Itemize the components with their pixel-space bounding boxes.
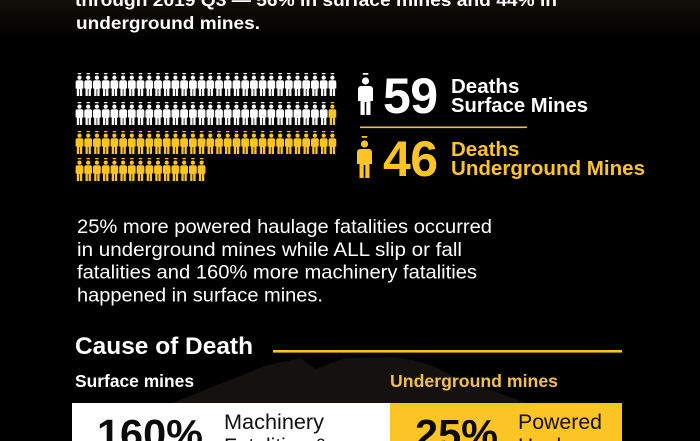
label: deaths underground mines: Underground Mines: [451, 157, 645, 180]
panel: surface mines: [72, 403, 390, 441]
icon: yellow person: [357, 136, 372, 178]
underground mines stat: [357, 131, 645, 187]
pictogram: 105 deaths, 59 white and 46 yellow: [76, 73, 336, 181]
heading: cause of death: Cause of Death: [75, 333, 253, 360]
body text: in underground mines while ALL slip or fall: [77, 240, 462, 261]
label: deaths surface mines: Surface Mines: [451, 94, 588, 117]
icon: white person: [358, 73, 373, 115]
label: deaths surface mines: Deaths: [451, 75, 519, 98]
intro text: [75, 0, 557, 33]
surface mines stat: [358, 68, 588, 124]
panel: underground mines: [390, 403, 622, 441]
body text: happened in surface mines.: [77, 286, 323, 306]
intro text: underground mines.: [76, 13, 260, 33]
subheading: underground mines: Underground mines: [390, 371, 558, 391]
number: 59: 59: [383, 68, 438, 124]
body text: [77, 217, 492, 306]
subheading: surface mines: Surface mines: [75, 371, 194, 391]
background mountain: [172, 357, 526, 441]
label: deaths underground mines: Deaths: [451, 138, 519, 161]
number: 46: 46: [383, 131, 438, 187]
body text: fatalities and 160% more machinery fatalities: [77, 262, 477, 284]
body text: 25% more powered haulage fatalities occurred: [77, 217, 492, 238]
label: machinery fatalities: Machinery: [224, 411, 325, 434]
label: deaths underground mines: [451, 138, 645, 180]
label: powered haulage: Powered: [518, 411, 602, 434]
label: deaths surface mines: [451, 75, 588, 117]
